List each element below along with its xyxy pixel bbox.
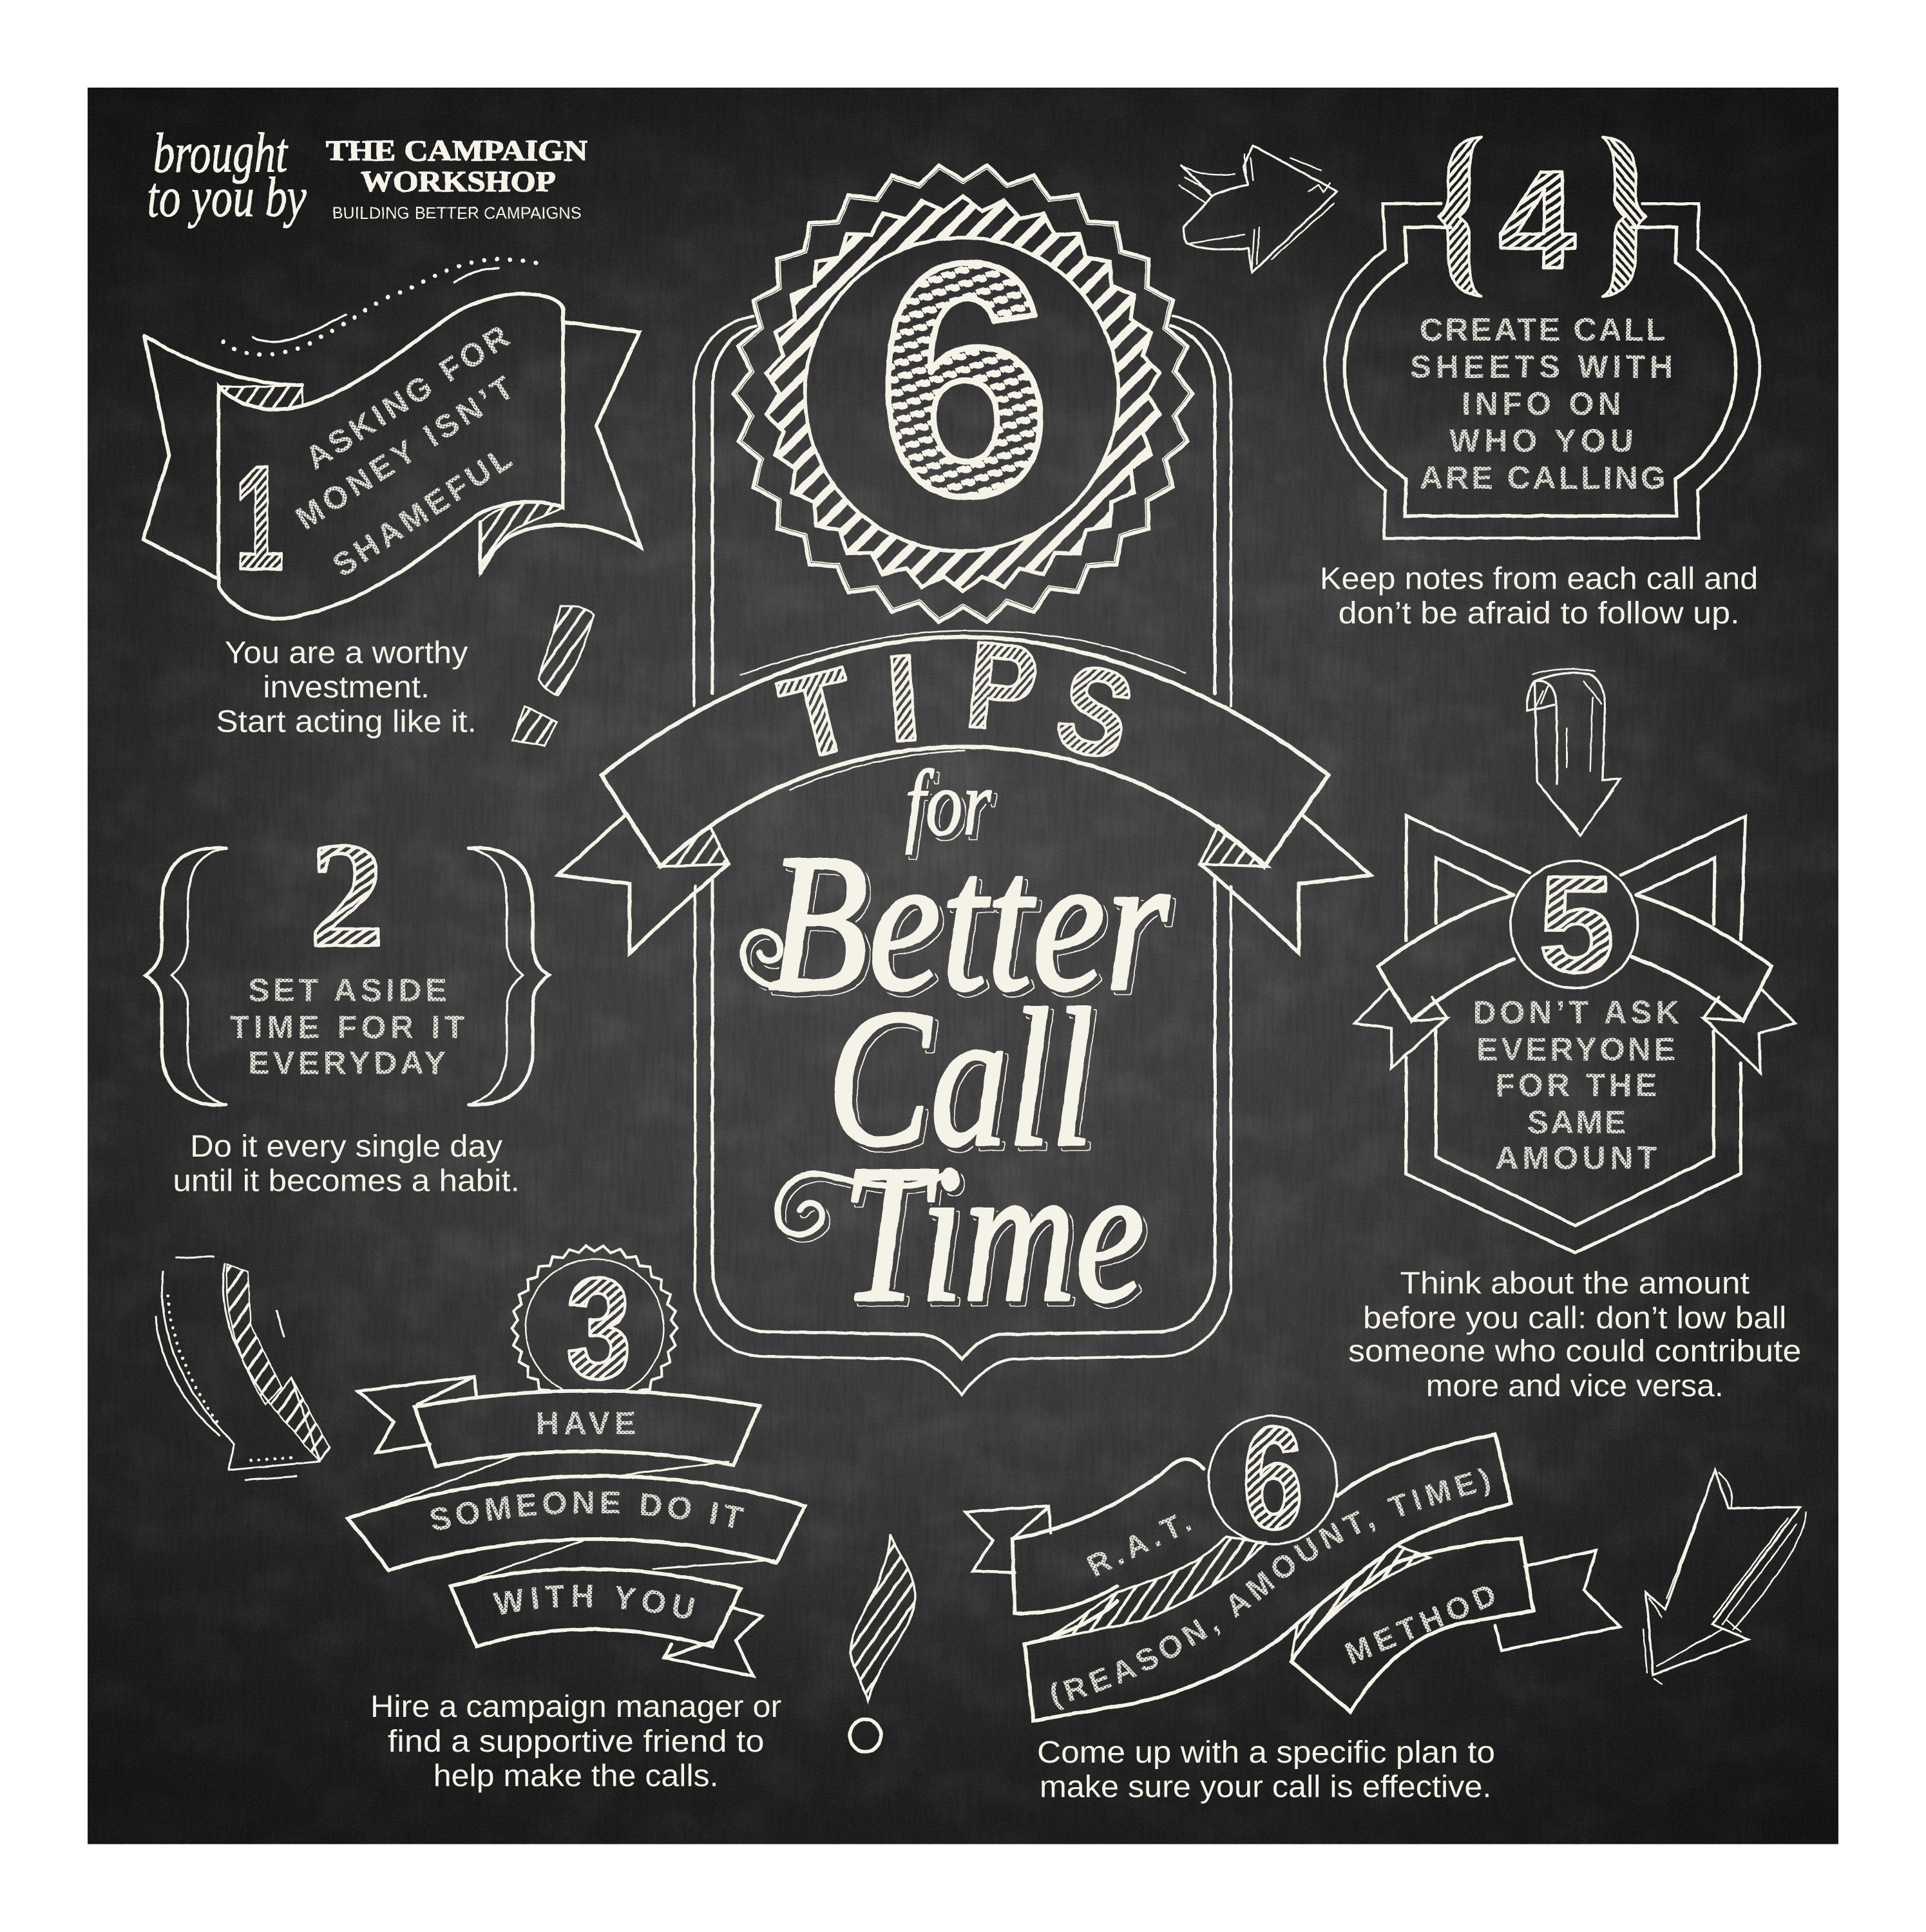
number circle [1208, 1416, 1337, 1544]
ribbon fold left [660, 826, 729, 867]
heading text: DON’T ASK [1473, 994, 1679, 1030]
heading text: SET ASIDE [248, 972, 447, 1008]
text block: tip 2 description [173, 1130, 520, 1198]
text block: tip 6 description: Come up with a specific plan to [1037, 1736, 1495, 1770]
panel: tip 6 [966, 1396, 1620, 1721]
text block: tip 3 description [370, 1690, 781, 1793]
panel: central tag frame [558, 124, 1371, 1395]
chalk artwork [141, 121, 1807, 1754]
panel: tip 2 [146, 811, 549, 1105]
text block: tip 3 description: find a supportive friend to [388, 1725, 764, 1759]
left tail [966, 1506, 1051, 1573]
heading text: EVERYDAY [248, 1045, 446, 1081]
logo: brought to you by: brought [153, 121, 289, 184]
heading text: METHOD [1340, 1578, 1501, 1672]
text block: tip 1 description [216, 636, 477, 739]
title: for Better Call Time: Better [768, 813, 1172, 1032]
arrow: lower right [1643, 1470, 1806, 1683]
panel: tip 4 [1325, 137, 1759, 538]
big number 6: 6 [877, 194, 1052, 564]
heading text: SOMEONE DO IT [430, 1492, 745, 1530]
dotted flourish [224, 260, 536, 355]
heading text [426, 1405, 750, 1628]
sunburst badge [730, 163, 1196, 625]
heading text: CREATE CALL [1420, 312, 1666, 348]
heading text: TIME FOR IT [229, 1009, 464, 1045]
title: for Better Call Time [743, 751, 1172, 1343]
heading text [229, 972, 464, 1081]
text block: tip 3 description: help make the calls. [434, 1759, 718, 1793]
heading text: WITH YOU [492, 1584, 694, 1619]
ribbon: connectors [374, 1455, 774, 1582]
left brace [146, 848, 226, 1105]
banner right tail [481, 322, 641, 574]
arrow: top right [1179, 146, 1337, 273]
text block: tip 4 description: don’t be afraid to follow up. [1339, 596, 1740, 630]
outer frame [694, 316, 1231, 1395]
icon: exclamation mark 1 [512, 606, 594, 746]
heading text [289, 318, 520, 583]
heading text: MONEY ISN’T [289, 369, 520, 536]
flourish: T swash [777, 1173, 948, 1235]
ribbon: SOMEONE DO IT [348, 1476, 805, 1570]
text block: tip 5 description [1348, 1267, 1801, 1403]
ribbon: left tail [358, 1376, 477, 1453]
text block: tip 4 description [1320, 562, 1758, 630]
text block: tip 6 description [1037, 1736, 1495, 1804]
text block: tip 1 description: You are a worthy [225, 636, 468, 670]
number 5: 5 [1538, 848, 1615, 1001]
text block: tip 5 description: someone who could contribute [1348, 1334, 1801, 1368]
heading text: ARE CALLING [1420, 460, 1666, 496]
number circle [1511, 861, 1637, 988]
text block: tip 6 description: make sure your call is effective. [1040, 1770, 1491, 1804]
title: TIPS: I [881, 628, 925, 768]
text block: tip 1 description: investment. [263, 670, 430, 705]
logo: The Campaign Workshop [326, 134, 587, 222]
title: TIPS: S [1044, 636, 1147, 788]
right hatched brace [1603, 137, 1646, 296]
logo: The Campaign Workshop: WORKSHOP [361, 165, 555, 198]
text block: tip 4 description: Keep notes from each call and [1320, 562, 1758, 596]
ribbon right tail [1200, 815, 1371, 953]
text block: tip 2 description: until it becomes a habit. [173, 1164, 520, 1198]
banner left tail [143, 336, 303, 579]
left tail [1355, 989, 1447, 1068]
heading text: R.A.T. [1082, 1504, 1197, 1584]
inner frame [712, 326, 1215, 1359]
title: for Better Call Time: Time [842, 1124, 1145, 1343]
outer shield [1406, 816, 1746, 1253]
heading text [1410, 312, 1673, 496]
ribbon: HAVE [415, 1391, 759, 1466]
text block: tip 2 description: Do it every single day [190, 1130, 502, 1164]
panel: tip 3 [345, 1244, 808, 1678]
arrow: lower left [156, 1256, 330, 1480]
band: R.A.T. [1013, 1459, 1204, 1613]
ribbon left tail [558, 815, 729, 953]
logo: The Campaign Workshop: BUILDING BETTER CAMPAIGNS [332, 204, 582, 222]
ribbon: right tail [664, 1607, 762, 1676]
logo: brought to you by: to you by [147, 166, 307, 229]
right tail [1704, 989, 1795, 1073]
heading text: (REASON, AMOUNT, TIME) [1051, 1468, 1491, 1710]
fold hatch 1 [1032, 1537, 1266, 1643]
flourish: B curl [743, 932, 815, 989]
heading text: SHAMEFUL [326, 440, 518, 583]
number 2: 2 [309, 811, 385, 978]
text block: tip 3 description: Hire a campaign manager or [370, 1690, 781, 1724]
icon: exclamation mark 2 [850, 1534, 915, 1752]
banner front [218, 294, 563, 619]
band: METHOD [1292, 1538, 1533, 1712]
number 6: 6 [1242, 1396, 1304, 1559]
text block: tip 5 description: Think about the amount [1400, 1267, 1750, 1301]
title: for Better Call Time: for [905, 751, 992, 855]
left hatched brace [1438, 137, 1482, 296]
title: TIPS [769, 615, 1147, 788]
heading text: WHO YOU [1449, 423, 1634, 459]
ribbon: WITH YOU [451, 1569, 741, 1647]
heading text: ASKING FOR [299, 318, 515, 476]
text block: tip 5 description: more and vice versa. [1426, 1369, 1724, 1403]
heading text: SAME [1527, 1104, 1626, 1141]
banner left fold hatch [220, 384, 303, 410]
heading text: SHEETS WITH [1410, 349, 1673, 385]
panel: tip 1 banner [143, 260, 641, 619]
heading text: AMOUNT [1495, 1140, 1657, 1176]
title ribbon [558, 630, 1371, 953]
inner frame [1344, 227, 1736, 516]
panel: tip 5 [1355, 816, 1795, 1253]
heading text: FOR THE [1495, 1067, 1657, 1103]
text block: tip 1 description: Start acting like it. [216, 705, 477, 739]
badge with number 3 [512, 1246, 677, 1410]
right tail [1495, 1550, 1620, 1651]
title: for Better Call Time: Call [827, 969, 1094, 1188]
heading text: INFO ON [1462, 386, 1621, 422]
heading text: HAVE [536, 1405, 636, 1441]
text block: tip 5 description: before you call: don’t low ball [1363, 1301, 1786, 1335]
heading text: EVERYONE [1476, 1031, 1675, 1067]
fold hatch 2 [1292, 1546, 1430, 1662]
logo: brought to you by [147, 121, 307, 229]
title: TIPS: P [960, 615, 1044, 759]
outer frame [1325, 204, 1759, 538]
inner shield [1436, 858, 1715, 1226]
title: TIPS: T [769, 643, 869, 786]
ribbon [1355, 895, 1795, 1073]
number 1: 1 [234, 435, 284, 601]
band: reason amount time [1025, 1434, 1511, 1721]
arrow: above tip 5 [1527, 669, 1620, 836]
heading text [1473, 994, 1679, 1176]
right brace [468, 848, 549, 1105]
number 3: 3 [566, 1249, 631, 1408]
banner right fold hatch [481, 502, 563, 574]
number 4: 4 [1498, 142, 1576, 298]
ribbon fold right [1200, 826, 1268, 867]
logo: The Campaign Workshop: THE CAMPAIGN [326, 134, 587, 167]
